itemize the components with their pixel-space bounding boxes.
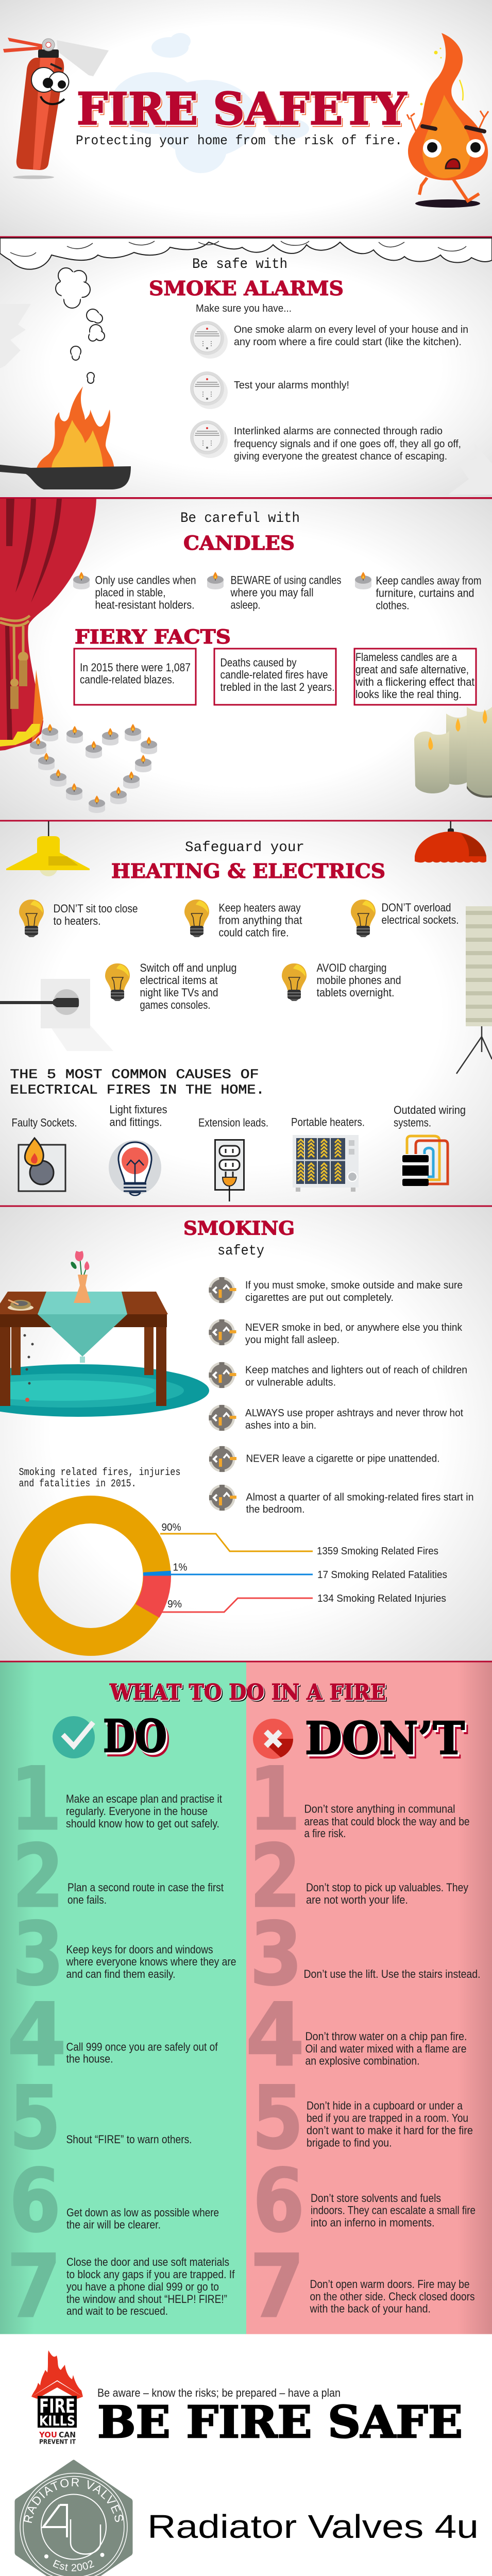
tip: unplug at night: Switch off and unplug bbox=[140, 961, 237, 974]
heading: do: DO bbox=[103, 1710, 167, 1762]
icon: bulb bbox=[184, 900, 209, 937]
tip: stable holders: heat-resistant holders. bbox=[95, 599, 195, 611]
smoke puffs bbox=[56, 268, 105, 383]
icon: tealight bbox=[73, 572, 90, 589]
chart title bbox=[19, 1467, 180, 1490]
icon: floor lamp bbox=[456, 906, 492, 1074]
title: FIRE SAFETY bbox=[78, 86, 409, 137]
tip: never unattended: NEVER leave a cigarette or pipe unattended. bbox=[246, 1453, 440, 1464]
don't 1 text: areas that could block the way and be bbox=[304, 1815, 470, 1828]
donut chart bbox=[25, 1510, 313, 1642]
red divider bbox=[0, 1206, 492, 1207]
heading: be fire safe: BE FIRE SAFE bbox=[97, 2397, 463, 2448]
do 2 text: one fails. bbox=[67, 1893, 107, 1906]
don't 7 text bbox=[310, 2278, 475, 2315]
fact box: deaths: Deaths caused by bbox=[220, 656, 297, 669]
icon: flame on frying pan bbox=[0, 386, 131, 489]
icon: cigarette bullet bbox=[209, 1404, 236, 1431]
don't 1 text: a fire risk. bbox=[304, 1827, 346, 1840]
don't 4 text: an explosive combination. bbox=[305, 2055, 419, 2067]
tip: keep heaters away: from anything that bbox=[218, 914, 302, 926]
tip: smoke outside: If you must smoke, smoke outside and make sure bbox=[245, 1280, 463, 1291]
icon: tealight bbox=[355, 572, 371, 589]
numeral 5: 5 bbox=[252, 2067, 303, 2168]
cause: light fixtures: Light fixtures bbox=[109, 1103, 167, 1116]
icon: flameless candles bbox=[414, 707, 492, 798]
tip: stable holders: Only use candles when bbox=[95, 574, 196, 586]
tip: proper ashtrays bbox=[245, 1408, 463, 1431]
tip: falling asleep: BEWARE of using candles bbox=[231, 574, 341, 586]
logo: fire kills bbox=[31, 2350, 83, 2445]
tip: bedroom: the bedroom. bbox=[246, 1504, 305, 1515]
fact box: deaths: candle-related fires have bbox=[220, 668, 328, 681]
heading: what to do in a fire: WHAT TO DO IN A FIRE bbox=[109, 1680, 386, 1705]
panel: heating and electrics bbox=[0, 821, 492, 1206]
tip: stable holders: placed in stable, bbox=[95, 586, 166, 599]
icon: cigarette bullet bbox=[209, 1446, 236, 1472]
tip: overload sockets: electrical sockets. bbox=[381, 913, 459, 926]
don't 5 text: don’t want to make it hard for the fire bbox=[307, 2124, 473, 2137]
icon: bulb bbox=[19, 900, 44, 937]
fact box: deaths: trebled in the last 2 years. bbox=[220, 681, 335, 693]
heading: smoking: SMOKING bbox=[183, 1218, 295, 1240]
cause: extension leads: Extension leads. bbox=[198, 1116, 268, 1129]
don't 4 text bbox=[305, 2030, 467, 2067]
tip: never in bed: you might fall asleep. bbox=[245, 1334, 340, 1346]
logo: fire kills: PREVENT IT bbox=[39, 2438, 76, 2445]
icon: cigarette bullet bbox=[209, 1277, 236, 1303]
logo: fire kills: CAN bbox=[59, 2430, 76, 2439]
chart legend bbox=[317, 1546, 447, 1604]
don't 2 text: Don’t stop to pick up valuables. They bbox=[306, 1881, 468, 1894]
icon: yellow lamp bbox=[6, 821, 90, 876]
fact box: blazes: candle-related blazes. bbox=[80, 673, 175, 686]
heading: don't: DON’T bbox=[305, 1713, 465, 1765]
tagline: Be aware – know the risks; be prepared – have a plan bbox=[97, 2386, 341, 2399]
donut chart: 9% bbox=[167, 1599, 182, 1610]
company name: Radiator Valves 4u bbox=[147, 2508, 479, 2545]
don't 4 text: Don’t throw water on a chip pan fire. bbox=[305, 2030, 467, 2043]
tip: one alarm per level bbox=[234, 324, 468, 348]
panel: don't column background bbox=[246, 1662, 492, 2334]
tip: falling asleep: where you may fall bbox=[230, 586, 313, 599]
icon: smoke alarm bbox=[190, 321, 228, 359]
heading: do: DO bbox=[105, 1713, 168, 1765]
do 4 text: the house. bbox=[66, 2053, 113, 2065]
tip: overload sockets bbox=[381, 901, 459, 926]
tip: test monthly: Test your alarms monthly! bbox=[234, 380, 349, 391]
heading: safety: safety bbox=[217, 1243, 264, 1259]
do 6 text: Get down as low as possible where bbox=[66, 2206, 219, 2219]
don't 7 text: Don’t open warm doors. Fire may be bbox=[310, 2278, 470, 2291]
tip: interlinked alarms: giving everyone the greatest chance of escaping. bbox=[234, 451, 447, 462]
do 2 text: Plan a second route in case the first bbox=[67, 1881, 224, 1894]
don't 1 text bbox=[304, 1802, 470, 1840]
tip: falling asleep bbox=[230, 574, 341, 611]
tip: heaters distance bbox=[54, 902, 138, 927]
numeral 2: 2 bbox=[12, 1826, 64, 1927]
tip: smoke outside bbox=[245, 1280, 463, 1303]
tip: charging overnight: AVOID charging bbox=[316, 961, 386, 974]
do 2 text bbox=[67, 1881, 224, 1906]
don't 7 text: with the back of your hand. bbox=[310, 2302, 431, 2315]
fact box: blazes: In 2015 there were 1,087 bbox=[80, 661, 191, 674]
heading: five causes: ELECTRICAL FIRES IN THE HOME. bbox=[10, 1082, 265, 1097]
tip: overload sockets: DON’T overload bbox=[381, 901, 451, 914]
do 6 text: the air will be clearer. bbox=[66, 2218, 161, 2231]
tip: proper ashtrays: ALWAYS use proper ashtrays and never throw hot bbox=[245, 1408, 463, 1419]
panel: footer bbox=[14, 2350, 479, 2576]
heading: smoke alarms: SMOKE ALARMS bbox=[149, 277, 344, 300]
don't 6 text: Don’t store solvents and fuels bbox=[311, 2192, 441, 2205]
logo: radiator valves 4u: RADIATOR VALVES bbox=[24, 2478, 123, 2523]
panel: smoke alarms bbox=[0, 238, 492, 497]
do 1 text: Make an escape plan and practise it bbox=[66, 1792, 222, 1805]
do 7 text: the window and shout “HELP! FIRE!” bbox=[66, 2293, 227, 2306]
chart title: Smoking related fires, injuries bbox=[19, 1467, 180, 1479]
icon: table with runner and rug bbox=[0, 1251, 209, 1417]
tip: matches and lighters bbox=[245, 1364, 467, 1388]
tip: unplug at night: night like TVs and bbox=[140, 986, 218, 999]
tip: interlinked alarms bbox=[234, 426, 461, 462]
numeral 1: 1 bbox=[10, 1749, 62, 1850]
tip: stable holders bbox=[95, 574, 196, 611]
tip: heaters distance: to heaters. bbox=[54, 914, 101, 927]
heading: candles: CANDLES bbox=[183, 532, 295, 554]
tip: keep away from furniture bbox=[376, 574, 481, 612]
subtitle: Protecting your home from the risk of fire. bbox=[76, 133, 402, 148]
heading: be safe with: Be safe with bbox=[192, 257, 287, 273]
panel: do column background bbox=[0, 1662, 246, 2334]
tip: charging overnight bbox=[316, 961, 401, 999]
tip: matches and lighters: or vulnerable adults. bbox=[245, 1377, 336, 1388]
numeral 6: 6 bbox=[9, 2150, 61, 2251]
tip: unplug at night: electrical items at bbox=[140, 974, 217, 987]
icon: cigarette bullet bbox=[209, 1485, 236, 1511]
tip: keep heaters away bbox=[218, 902, 302, 939]
tip: smoke outside: cigarettes are put out completely. bbox=[245, 1292, 394, 1303]
icon: check mark bbox=[53, 1716, 95, 1758]
pale clouds behind title bbox=[111, 33, 309, 173]
don't 5 text bbox=[307, 2099, 473, 2149]
chart legend: 17 Smoking Related Fatalities bbox=[317, 1569, 447, 1581]
do 7 text: and wait to be rescued. bbox=[66, 2304, 168, 2317]
don't 1 text: Don’t store anything in communal bbox=[304, 1802, 455, 1816]
tip: one alarm per level: any room where a fire could start (like the kitchen). bbox=[234, 336, 462, 348]
tip: keep away from furniture: furniture, curtains and bbox=[376, 586, 474, 600]
heading: what to do in a fire: WHAT TO DO IN A FIRE bbox=[110, 1681, 386, 1705]
tip: charging overnight: mobile phones and bbox=[316, 974, 401, 987]
don't 2 text bbox=[306, 1881, 468, 1906]
icon: extinguisher character bbox=[3, 38, 109, 179]
red divider bbox=[0, 236, 492, 238]
icon: cross mark bbox=[253, 1719, 293, 1759]
logo: fire kills: KILLS bbox=[39, 2413, 75, 2429]
do 1 text: regularly. Everyone in the house bbox=[66, 1805, 208, 1818]
heading: don't: DON’T bbox=[308, 1717, 468, 1769]
red divider bbox=[0, 820, 492, 821]
do list bbox=[7, 1749, 236, 2337]
tip: interlinked alarms: frequency signals and if one goes off, they all go off, bbox=[234, 438, 461, 450]
do 3 text: and can find them easily. bbox=[66, 1968, 175, 1980]
cause: outdated wiring: systems. bbox=[394, 1116, 431, 1129]
numeral 3: 3 bbox=[12, 1904, 64, 2005]
tip: never in bed bbox=[245, 1322, 463, 1346]
donut chart: 1% bbox=[173, 1562, 188, 1573]
icon: smoke alarm bbox=[190, 420, 228, 458]
fact box: deaths bbox=[214, 649, 336, 705]
do 1 text bbox=[66, 1792, 222, 1830]
icon: red lamp bbox=[415, 821, 486, 862]
fact box: flameless candles: Flameless candles are a bbox=[355, 651, 457, 664]
don't 4 text: Oil and water mixed with a flame are bbox=[305, 2042, 467, 2055]
heading: safeguard your: Safeguard your bbox=[185, 840, 304, 856]
tip: proper ashtrays: ashes into a bin. bbox=[245, 1420, 316, 1431]
heading: five causes: THE 5 MOST COMMON CAUSES OF bbox=[10, 1066, 259, 1082]
chart legend: 1359 Smoking Related Fires bbox=[317, 1546, 438, 1557]
logo: radiator valves 4u: Est 2002 bbox=[53, 2560, 94, 2571]
tip: never in bed: NEVER smoke in bed, or anywhere else you think bbox=[245, 1322, 463, 1333]
title: FIRE SAFETY bbox=[77, 84, 408, 136]
chart title: and fatalities in 2015. bbox=[19, 1478, 136, 1490]
cause: portable heaters: Portable heaters. bbox=[291, 1116, 365, 1128]
cause: light fixtures bbox=[109, 1103, 167, 1195]
icon: bulb bbox=[282, 963, 307, 1001]
tip: bedroom bbox=[246, 1492, 474, 1515]
heading: be careful with: Be careful with bbox=[180, 511, 300, 527]
panel: smoking bbox=[0, 1207, 492, 1661]
cause: portable heaters bbox=[291, 1116, 365, 1192]
logo: radiator valves 4u bbox=[14, 2460, 133, 2576]
don't 5 text: brigade to find you. bbox=[307, 2136, 392, 2149]
numeral 1: 1 bbox=[249, 1749, 300, 1850]
icon: red curtain bbox=[0, 499, 96, 751]
icon: cigarette bullet bbox=[209, 1362, 236, 1388]
cause: extension leads bbox=[198, 1116, 268, 1201]
heading: what to do in a fire: WHAT TO DO IN A FIRE bbox=[111, 1681, 387, 1706]
icon: bulb bbox=[105, 963, 130, 1001]
logo: fire kills: YOU bbox=[39, 2430, 57, 2439]
icon: wall socket bbox=[0, 979, 113, 1051]
tip: falling asleep: asleep. bbox=[231, 599, 261, 611]
smoke cloud band bbox=[0, 238, 492, 269]
heading: fiery facts: FIERY FACTS bbox=[75, 625, 231, 648]
chart legend: 134 Smoking Related Injuries bbox=[317, 1593, 446, 1604]
do 7 text: Close the door and use soft materials bbox=[66, 2256, 229, 2268]
panel: header bbox=[0, 0, 492, 238]
tip: heaters distance: DON’T sit too close bbox=[54, 902, 138, 915]
don't 6 text bbox=[311, 2192, 476, 2229]
fact box: blazes bbox=[74, 649, 196, 705]
title: FIRE SAFETY bbox=[77, 83, 407, 135]
fact box: flameless candles: with a flickering effect that bbox=[355, 675, 474, 688]
tip: unplug at night: games consoles. bbox=[140, 998, 210, 1011]
do 4 text: Call 999 once you are safely out of bbox=[66, 2040, 218, 2054]
do 5 text: Shout “FIRE” to warn others. bbox=[66, 2133, 192, 2146]
tip: keep away from furniture: clothes. bbox=[376, 599, 409, 612]
tip: interlinked alarms: Interlinked alarms are connected through radio bbox=[234, 426, 443, 437]
tip: matches and lighters: Keep matches and lighters out of reach of children bbox=[245, 1364, 467, 1376]
don't 6 text: into an inferno in moments. bbox=[311, 2216, 435, 2229]
do 4 text bbox=[66, 2040, 218, 2065]
numeral 3: 3 bbox=[250, 1904, 302, 2005]
heading: do: DO bbox=[106, 1715, 170, 1767]
fact box: flameless candles: looks like the real thing. bbox=[355, 688, 462, 701]
do 7 text: you have a phone dial 999 or go to bbox=[66, 2280, 219, 2293]
heading: heating and electrics: HEATING & ELECTRICS bbox=[111, 859, 385, 883]
heading: five causes bbox=[10, 1066, 265, 1097]
don't 5 text: Don’t hide in a cupboard or under a bbox=[307, 2099, 463, 2112]
numeral 4: 4 bbox=[246, 1985, 304, 2086]
pale background flames bbox=[0, 304, 492, 495]
do 3 text: Keep keys for doors and windows bbox=[66, 1943, 213, 1956]
numeral 6: 6 bbox=[253, 2150, 304, 2251]
icon: cigarette bullet bbox=[209, 1319, 236, 1346]
intro text: Make sure you have... bbox=[196, 303, 292, 314]
logo: fire kills: FIRE bbox=[39, 2395, 75, 2417]
do 3 text bbox=[66, 1943, 236, 1980]
cause: light fixtures: and fittings. bbox=[109, 1116, 162, 1128]
icon: flame character bbox=[407, 33, 488, 208]
fact box: flameless candles: great and safe alternative, bbox=[355, 663, 469, 676]
numeral 4: 4 bbox=[7, 1985, 66, 2086]
icon: tealight heart bbox=[30, 724, 157, 813]
numeral 5: 5 bbox=[9, 2067, 61, 2168]
tip: keep heaters away: could catch fire. bbox=[218, 926, 289, 939]
icon: tealight bbox=[207, 572, 224, 589]
numeral 7: 7 bbox=[250, 2236, 304, 2337]
heading: don't: DON’T bbox=[307, 1715, 466, 1767]
cause: outdated wiring: Outdated wiring bbox=[394, 1104, 466, 1116]
don't 5 text: bed if you are trapped in a room. You bbox=[307, 2111, 468, 2125]
tip: unplug at night bbox=[140, 961, 237, 1011]
don't list bbox=[246, 1749, 480, 2337]
tip: one alarm per level: One smoke alarm on every level of your house and in bbox=[234, 324, 468, 335]
don't 2 text: are not worth your life. bbox=[306, 1893, 408, 1906]
tip: keep heaters away: Keep heaters away bbox=[218, 902, 301, 914]
cause: faulty sockets bbox=[11, 1116, 77, 1191]
do 3 text: where everyone knows where they are bbox=[66, 1955, 236, 1968]
donut chart: 90% bbox=[162, 1522, 181, 1533]
numeral 7: 7 bbox=[7, 2236, 61, 2337]
do 7 text bbox=[66, 2256, 235, 2317]
icon: smoke alarm bbox=[190, 371, 228, 409]
numeral 2: 2 bbox=[250, 1826, 301, 1927]
fact box: flameless candles bbox=[354, 649, 476, 705]
do 6 text bbox=[66, 2206, 219, 2231]
red divider bbox=[0, 497, 492, 499]
cause: faulty sockets: Faulty Sockets. bbox=[11, 1116, 77, 1129]
icon: bulb bbox=[351, 900, 376, 937]
do 7 text: to block any gaps if you are trapped. If bbox=[66, 2268, 235, 2281]
panel: candles bbox=[0, 499, 492, 820]
tip: bedroom: Almost a quarter of all smoking-related fires start in bbox=[246, 1492, 474, 1503]
cause: outdated wiring bbox=[394, 1104, 466, 1186]
do 1 text: should know how to get out safely. bbox=[66, 1817, 219, 1830]
red divider bbox=[0, 1661, 492, 1662]
tip: charging overnight: tablets overnight. bbox=[316, 986, 395, 999]
